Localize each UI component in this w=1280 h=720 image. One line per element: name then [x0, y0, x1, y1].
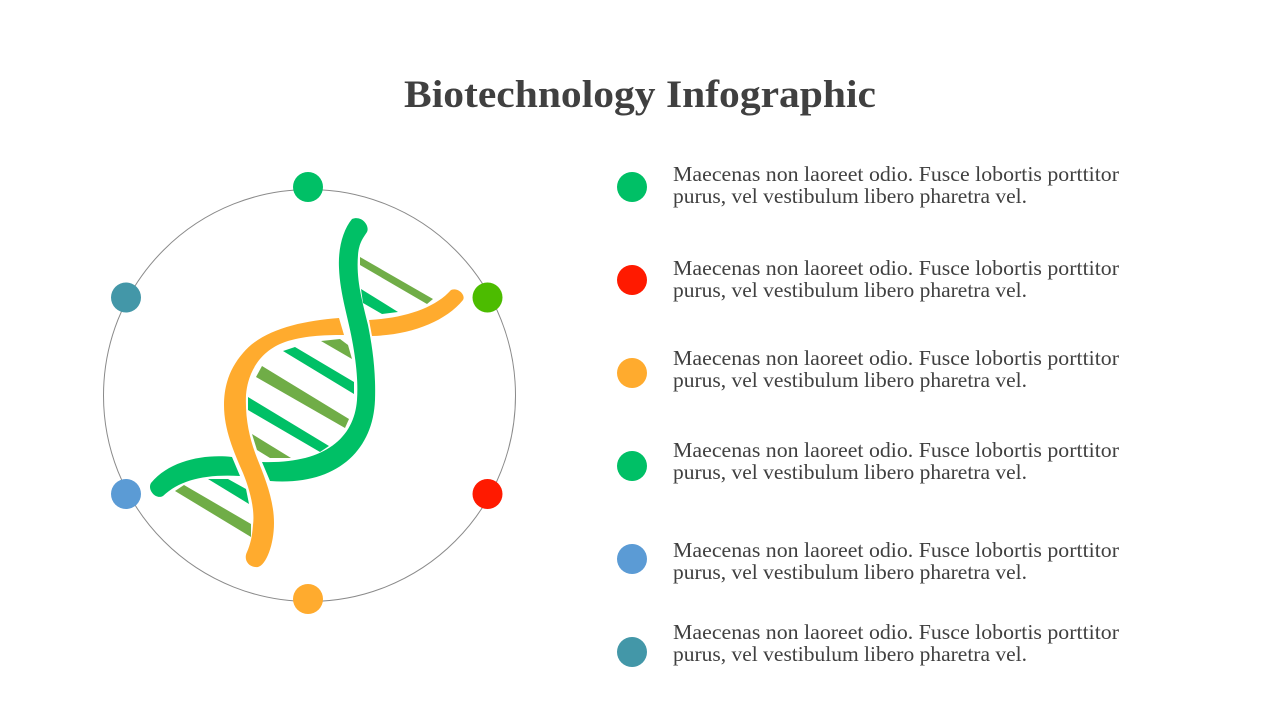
legend item 1 [617, 162, 1119, 208]
legend item 1: purus, vel vestibulum libero pharetra vel. [673, 184, 1027, 208]
legend item 2: Maecenas non laoreet odio. Fusce lobortis porttitor [673, 256, 1119, 280]
legend item 6 [617, 620, 1119, 667]
legend item 4 [617, 438, 1119, 484]
legend item 5 [617, 538, 1119, 584]
DNA orange strand [224, 289, 464, 567]
legend item 2 [617, 256, 1119, 302]
legend item 6: Maecenas non laoreet odio. Fusce lobortis porttitor [673, 620, 1119, 644]
legend item 2: purus, vel vestibulum libero pharetra vel. [673, 278, 1027, 302]
ring markers [111, 172, 502, 614]
DNA green strand [150, 218, 375, 497]
legend item 6: purus, vel vestibulum libero pharetra vel. [673, 642, 1027, 666]
legend item 5: Maecenas non laoreet odio. Fusce lobortis porttitor [673, 538, 1119, 562]
legend item 1: Maecenas non laoreet odio. Fusce lobortis porttitor [673, 162, 1119, 186]
legend item 3: Maecenas non laoreet odio. Fusce lobortis porttitor [673, 346, 1119, 370]
legend item 3 [617, 346, 1119, 392]
legend item 4: Maecenas non laoreet odio. Fusce lobortis porttitor [673, 438, 1119, 462]
ring [104, 190, 516, 602]
chart: DNA circle diagram [104, 172, 516, 614]
DNA base-pair rungs [175, 257, 433, 537]
legend item 3: purus, vel vestibulum libero pharetra vel. [673, 368, 1027, 392]
legend item 4: purus, vel vestibulum libero pharetra vel. [673, 460, 1027, 484]
legend item 5: purus, vel vestibulum libero pharetra vel. [673, 560, 1027, 584]
title: Biotechnology Infographic [404, 73, 876, 116]
